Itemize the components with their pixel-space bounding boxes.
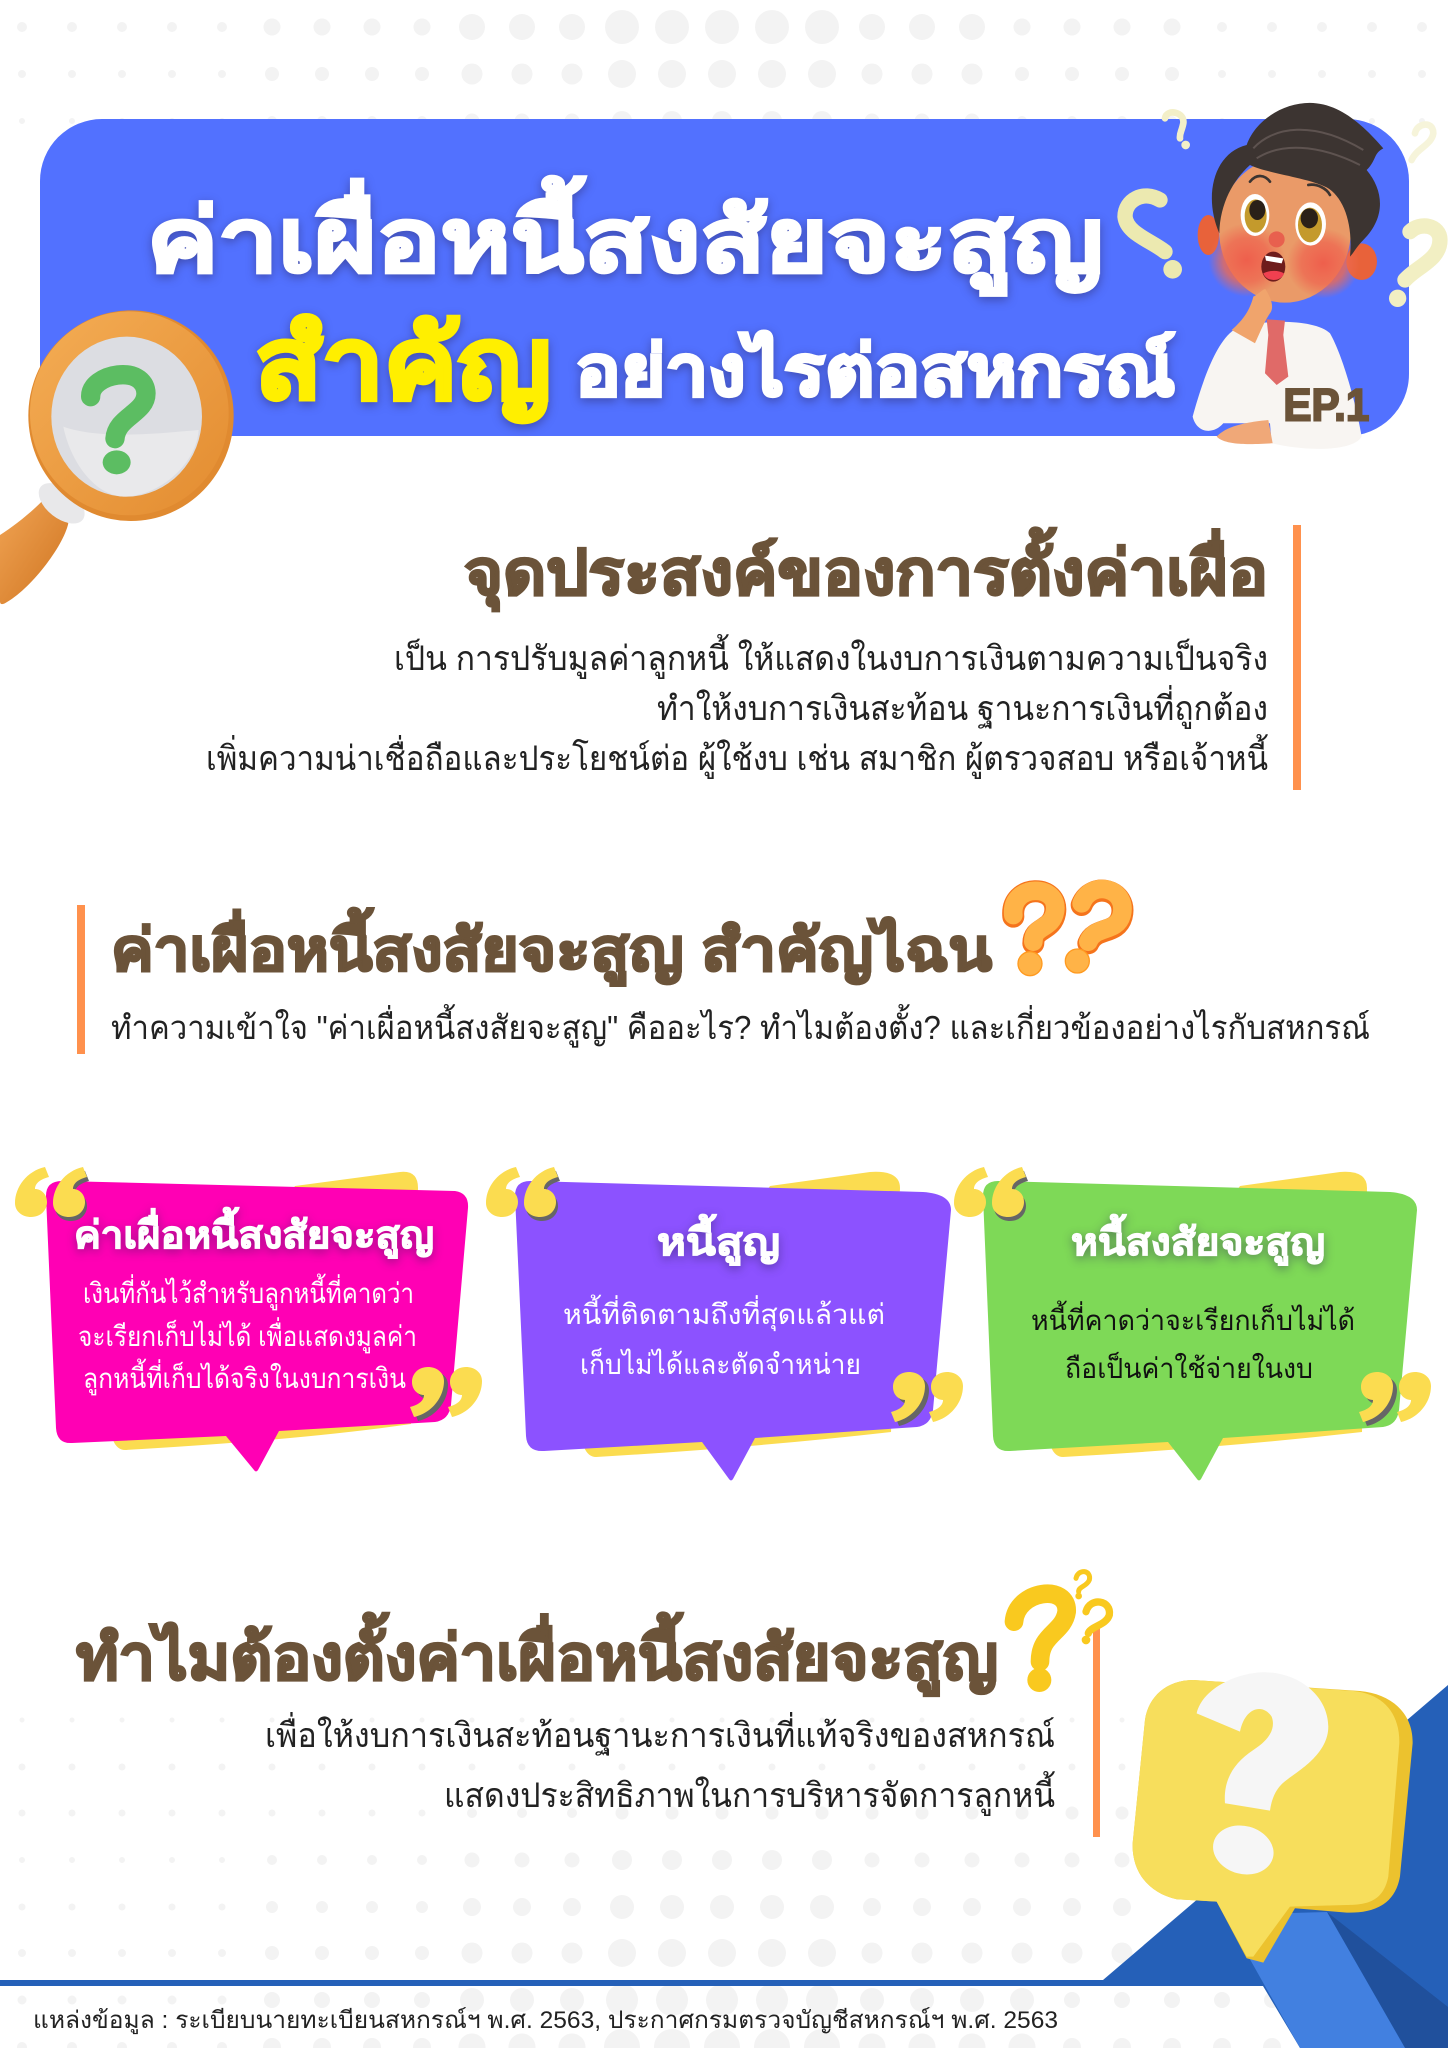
highlighted word: สำคัญ — [255, 308, 551, 423]
header banner — [40, 119, 1409, 436]
icon: pale question marks — [1125, 112, 1440, 307]
card body — [78, 1273, 417, 1396]
heading: importance: ค่าเผื่อหนี้สงสัยจะสูญ สำคัญไฉน — [111, 908, 992, 986]
heading: purpose: จุดประสงค์ของการตั้งค่าเผื่อ — [464, 527, 1268, 611]
icon: orange question marks — [1013, 889, 1122, 976]
accent bar — [1293, 525, 1301, 790]
card body: หนี้ที่คาดว่าจะเรียกเก็บไม่ได้ — [1031, 1300, 1355, 1336]
body text: แสดงประสิทธิภาพในการบริหารจัดการลูกหนี้ — [444, 1771, 1056, 1816]
decorative blue corner shapes — [0, 1685, 1448, 2048]
card body: จะเรียกเก็บไม่ได้ เพื่อแสดงมูลค่า — [78, 1317, 417, 1354]
body text: ทำความเข้าใจ "ค่าเผื่อหนี้สงสัยจะสูญ" คืออะไร? ทำไมต้องตั้ง? และเกี่ยวข้องอย่างไรกับสหกรณ์ — [111, 1004, 1370, 1048]
card body: ลูกหนี้ที่เก็บได้จริงในงบการเงิน — [83, 1358, 406, 1396]
panel: why set allowance — [76, 1572, 1109, 1837]
character with EP.1 label — [1125, 103, 1440, 449]
card body — [1031, 1300, 1355, 1384]
body text: ทำให้งบการเงินสะท้อน ฐานะการเงินที่ถูกต้อง — [657, 685, 1268, 729]
title line 2 — [255, 308, 1175, 423]
title remainder: อย่างไรต่อสหกรณ์ — [575, 330, 1175, 410]
panel: purpose of allowance — [206, 525, 1301, 790]
card body: เก็บไม่ได้และตัดจำหน่าย — [580, 1347, 861, 1380]
title line 1: ค่าเผื่อหนี้สงสัยจะสูญ — [147, 176, 1103, 296]
icon: magnifying glass — [0, 310, 234, 604]
icon: yellow speech bubble with question mark — [1133, 1672, 1413, 1963]
card body — [563, 1294, 885, 1380]
card body: หนี้ที่ติดตามถึงที่สุดแล้วแต่ — [563, 1294, 885, 1332]
body text: เพื่อให้งบการเงินสะท้อนฐานะการเงินที่แท้จริงของสหกรณ์ — [265, 1712, 1055, 1756]
card: doubtful debt — [954, 1167, 1431, 1480]
card body: เงินที่กันไว้สำหรับลูกหนี้ที่คาดว่า — [83, 1273, 414, 1311]
footer source line: แหล่งข้อมูล : ระเบียบนายทะเบียนสหกรณ์ฯ พ.ศ. 2563, ประกาศกรมตรวจบัญชีสหกรณ์ฯ พ.ศ. 2563 — [33, 2006, 1058, 2035]
body text — [265, 1712, 1056, 1816]
accent bar — [1093, 1628, 1100, 1837]
body text: เพิ่มความน่าเชื่อถือและประโยชน์ต่อ ผู้ใช้งบ เช่น สมาชิก ผู้ตรวจสอบ หรือเจ้าหนี้ — [206, 734, 1269, 779]
card title: หนี้สงสัยจะสูญ — [1071, 1214, 1325, 1266]
card title: หนี้สูญ — [657, 1214, 780, 1266]
body text: เป็น การปรับมูลค่าลูกหนี้ ให้แสดงในงบการเงินตามความเป็นจริง — [394, 634, 1268, 679]
heading: why: ทำไมต้องตั้งค่าเผื่อหนี้สงสัยจะสูญ — [76, 1612, 998, 1696]
card: bad debt — [486, 1167, 963, 1480]
accent bar — [77, 905, 85, 1054]
card: allowance for doubtful accounts — [15, 1167, 482, 1472]
panel: why important — [77, 889, 1370, 1054]
EP.1 label: EP.1 — [1283, 380, 1369, 431]
card title: ค่าเผื่อหนี้สงสัยจะสูญ — [74, 1207, 434, 1259]
icon: yellow question marks — [1014, 1572, 1109, 1692]
card body: ถือเป็นค่าใช้จ่ายในงบ — [1065, 1351, 1313, 1384]
body text — [206, 634, 1269, 779]
